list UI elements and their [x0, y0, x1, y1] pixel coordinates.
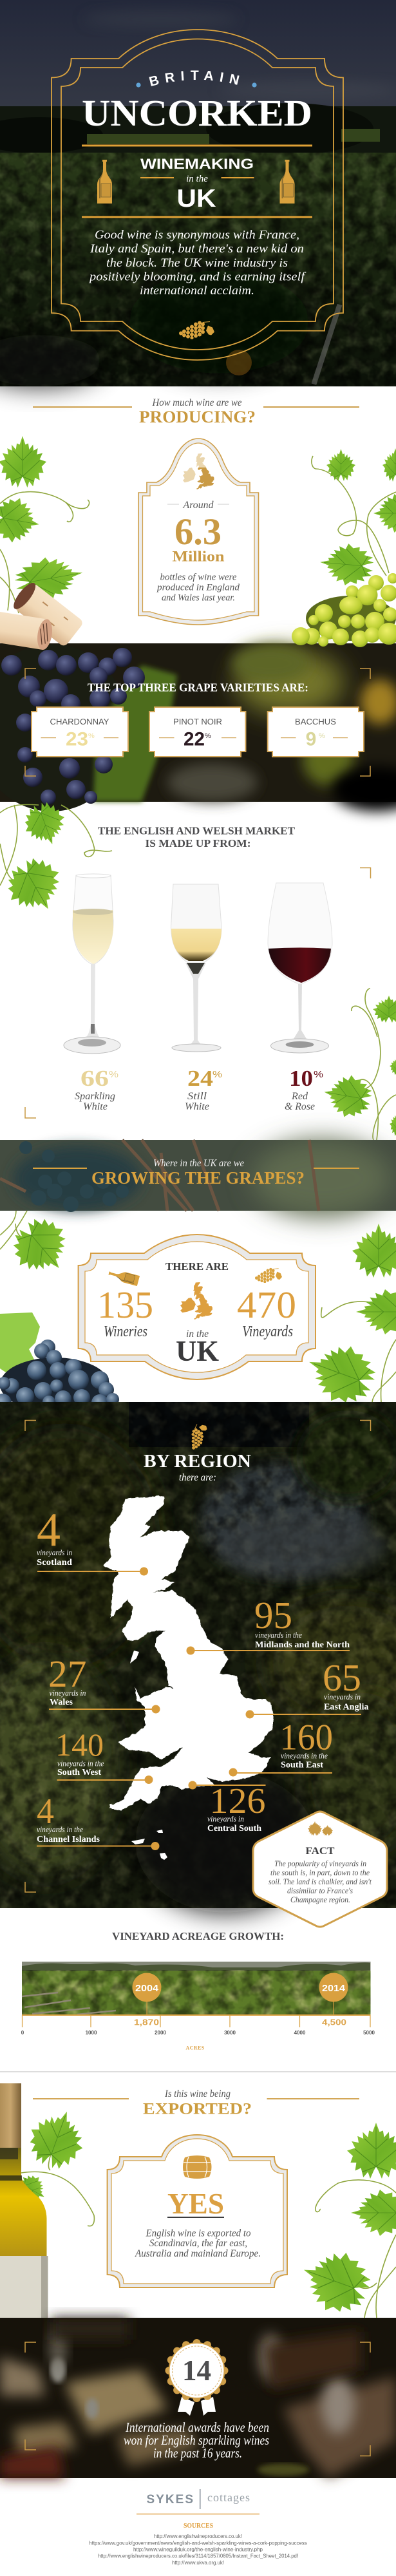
badge frame: [108, 2135, 287, 2287]
region: South West: [55, 1727, 153, 1784]
stat: sparkling white: White: [83, 1101, 108, 1112]
fact text: dissimilar to France's: [287, 1886, 353, 1895]
stat: red and rose: %: [314, 1069, 323, 1080]
axis labels: 0: [21, 2030, 24, 2036]
panel: market make-up: [0, 797, 396, 1140]
region: South East: South East: [281, 1761, 323, 1770]
region: Central South: vineyards in: [207, 1814, 244, 1824]
vines and leaves: [0, 797, 396, 1140]
sources: https://www.gov.uk/government/news/english-and-welsh-sparkling-wines-a-cork-popping-success: [89, 2540, 307, 2546]
region: Wales: 27: [48, 1653, 86, 1695]
in the UK: UK: [176, 1334, 219, 1367]
corner brackets: [25, 668, 370, 776]
intro text: Italy and Spain, but there's a new kid on: [90, 242, 304, 256]
axis title: ACRES: [185, 2045, 205, 2050]
export text: Australia and mainland Europe.: [135, 2248, 261, 2259]
corner brackets: [25, 2342, 370, 2456]
vines and leaves: [12, 2102, 396, 2322]
region: South East: vineyards in the: [281, 1750, 328, 1761]
axis labels: [21, 2030, 375, 2036]
stat: sparkling white: 66: [80, 1066, 109, 1091]
corner brackets: [25, 868, 371, 1118]
panel: producing section foliage: [0, 436, 396, 613]
intro text: [88, 228, 306, 298]
panel: by region: [0, 1402, 396, 1913]
region: Channel Islands: vineyards in the: [37, 1824, 83, 1834]
subtitle: in the: [186, 174, 208, 184]
panel: top three grape varieties: [0, 643, 396, 811]
fact text: soil. The land is chalkier, and isn't: [269, 1877, 372, 1886]
section heading: exported: [33, 2088, 359, 2117]
hexagon shape: [253, 1812, 387, 1927]
marker: 2014: 4,500: [322, 2017, 346, 2027]
sources: http://www.englishwineproducers.co.uk/files/3114/1857/0805/Instant_Fact_Sheet_2014.pdf: [98, 2553, 299, 2559]
stat: still white: %: [212, 1069, 222, 1080]
award text: won for English sparkling wines: [124, 2432, 269, 2448]
band photo background: [0, 1140, 396, 1217]
marker: 2004: 1,870: [134, 2017, 159, 2027]
icon: UK map: [183, 453, 214, 489]
stat: sparkling white: Sparkling: [75, 1091, 115, 1102]
fact text: the south is, in part, down to the: [270, 1868, 370, 1877]
region: East Anglia: [246, 1656, 368, 1718]
region: Midlands and the North: [187, 1594, 350, 1655]
card: Bacchus: [268, 707, 364, 757]
icon: UK map: [180, 1282, 212, 1320]
stat: still white: Still: [187, 1091, 207, 1102]
seal: [165, 2339, 228, 2402]
glass: sparkling white: [64, 874, 120, 1054]
section heading: producing: How much wine are we: [152, 397, 242, 408]
region: Midlands and the North: vineyards in the: [255, 1630, 302, 1640]
logo: Sykes cottages: cottages: [207, 2491, 250, 2504]
stat: wineries: Wineries: [104, 1323, 147, 1340]
award text: International awards have been: [125, 2420, 269, 2435]
stat: red and rose: [285, 1066, 323, 1112]
chart heading: VINEYARD ACREAGE GROWTH:: [112, 1930, 284, 1942]
glass: still white: [171, 884, 222, 1052]
region: Scotland: 4: [37, 1504, 61, 1557]
card: Chardonnay: 23: [66, 729, 88, 750]
region: South East: [229, 1717, 333, 1776]
intro text: international acclaim.: [140, 284, 254, 298]
panel: vineyard acreage growth: [21, 1930, 375, 2050]
market heading: [98, 824, 296, 849]
stat: still white: White: [185, 1101, 209, 1112]
band photo background: [0, 643, 396, 811]
region photo background: [0, 1402, 396, 1913]
award text: [124, 2420, 269, 2461]
stat: sparkling white: %: [109, 1069, 118, 1080]
vines left and right: [0, 456, 396, 613]
card: Bacchus: BACCHUS: [295, 717, 336, 726]
divider: [0, 2071, 396, 2072]
icon: barrel: [183, 2155, 211, 2179]
region: Wales: vineyards in: [49, 1688, 86, 1698]
ribbons: [178, 2397, 216, 2416]
panel: growing the grapes band: [0, 1140, 396, 1217]
region: South East: 160: [279, 1717, 333, 1758]
section heading: producing: [33, 397, 359, 426]
title: Britain arc: BRITAIN: [149, 71, 240, 86]
export text: English wine is exported to: [146, 2228, 251, 2239]
region: Central South: 126: [210, 1781, 265, 1821]
export text: [135, 2228, 261, 2259]
card: Pinot Noir: 22: [184, 729, 205, 750]
sources: http://www.wineguilduk.org/the-english-wine-industry.php: [133, 2546, 263, 2553]
image: white wine bottle: [0, 2083, 48, 2318]
subtitle: UK: [176, 185, 216, 213]
region: Scotland: Scotland: [37, 1558, 72, 1567]
axis labels: 1000: [86, 2030, 97, 2036]
sources: http://www.ukva.org.uk/: [172, 2560, 225, 2566]
badge frame: [138, 439, 259, 625]
card: Pinot Noir: PINOT NOIR: [173, 717, 222, 726]
section heading: growing: Where in the UK are we: [153, 1158, 244, 1169]
intro text: positively blooming, and is earning itself: [88, 270, 306, 283]
badge heading: THERE ARE: [165, 1260, 229, 1273]
stat: sparkling white: [75, 1066, 118, 1112]
stat: red and rose: 10: [289, 1066, 313, 1091]
icon: vine leaves: [308, 1821, 333, 1836]
glass: red and rose: [268, 883, 332, 1053]
region: South West: 140: [55, 1727, 104, 1763]
card: Pinot Noir: %: [205, 732, 211, 740]
card: Chardonnay: %: [88, 732, 95, 740]
region: South West: vineyards in the: [57, 1758, 104, 1768]
region: Midlands and the North: Midlands and the North: [255, 1640, 350, 1650]
vineyard photo strip: [22, 1962, 371, 2015]
around label: Around: [183, 500, 214, 511]
gold rule below subtitle: [82, 216, 312, 218]
image: green grapes: [292, 573, 396, 647]
icon: grapes: [179, 321, 214, 339]
map: Great Britain: [104, 1496, 274, 1860]
icon: grapes: [184, 1421, 211, 1452]
card: Chardonnay: CHARDONNAY: [50, 717, 109, 726]
stat: still white: [185, 1066, 222, 1112]
grape leaves right: [318, 448, 396, 588]
badge text: and Wales last year.: [162, 592, 235, 603]
axis labels: 5000: [363, 2030, 375, 2036]
card: Pinot Noir: [149, 707, 246, 757]
gold rule above subtitle: [82, 144, 312, 147]
subtitle: [140, 156, 254, 213]
region: Scotland: [37, 1504, 148, 1575]
region: Wales: [48, 1653, 160, 1713]
region: South West: South West: [57, 1768, 101, 1777]
fact text: The popularity of vineyards in: [274, 1859, 366, 1868]
icon: grapes: [255, 1268, 282, 1283]
region: Central South: Central South: [207, 1824, 261, 1833]
badge text: [156, 572, 240, 603]
region: Channel Islands: 4: [37, 1792, 54, 1832]
panel: exported section: [0, 2083, 396, 2322]
intro text: the block. The UK wine industry is: [106, 256, 288, 270]
yes answer: YES: [167, 2187, 224, 2220]
stat: vineyards: Vineyards: [242, 1323, 293, 1340]
vines and leaves: [0, 1208, 396, 1412]
icon: left bottle: [97, 160, 112, 204]
around label: [167, 500, 229, 511]
card: Chardonnay: [32, 707, 128, 757]
panel: wineries and vineyards: [0, 1208, 396, 1412]
market heading: THE ENGLISH AND WELSH MARKET: [98, 824, 296, 837]
band photo background: [0, 2318, 396, 2478]
ornate gold frame: [52, 30, 343, 360]
region: East Anglia: 65: [323, 1656, 361, 1699]
stat: still white: 24: [187, 1066, 213, 1091]
band heading: THE TOP THREE GRAPE VARIETIES ARE:: [88, 681, 308, 694]
fact heading: FACT: [305, 1846, 335, 1857]
region: Scotland: vineyards in: [37, 1548, 72, 1557]
badge text: produced in England: [156, 582, 240, 592]
stat: red and rose: Red: [291, 1091, 308, 1102]
heading: by region: [144, 1451, 251, 1483]
axis labels: 4000: [294, 2030, 306, 2036]
intro text: Good wine is synonymous with France,: [95, 228, 299, 242]
export text: Scandinavia, the far east,: [149, 2238, 247, 2249]
badge frame: [79, 1235, 316, 1379]
axis labels: 2000: [155, 2030, 166, 2036]
market heading: IS MADE UP FROM:: [146, 837, 251, 849]
logo: Sykes cottages: [147, 2489, 250, 2509]
badge text: bottles of wine were: [160, 572, 237, 582]
marker: 2004: [133, 1973, 161, 2027]
card: Bacchus: %: [319, 732, 325, 740]
rosette badge: [165, 2339, 228, 2416]
section heading: exported: EXPORTED?: [143, 2101, 252, 2117]
in the UK: in the: [186, 1329, 209, 1340]
fact text: Champagne region.: [290, 1895, 350, 1904]
region: Central South: [188, 1781, 265, 1833]
region: Midlands and the North: 95: [254, 1594, 292, 1636]
region: East Anglia: vineyards in: [324, 1692, 361, 1701]
number 6.3 million: [173, 511, 225, 564]
panel: awards band: [0, 2318, 396, 2478]
sources: http://www.englishwineproducers.co.uk/: [154, 2533, 243, 2539]
stat: wineries: 135: [97, 1283, 153, 1326]
number 14: 14: [182, 2354, 211, 2387]
logo: Sykes cottages: SYKES: [147, 2493, 193, 2506]
grape leaves left: [0, 436, 86, 606]
marker: 2014: [319, 1973, 348, 2027]
number 6.3 million: 6.3: [174, 511, 222, 553]
heading: by region: BY REGION: [144, 1451, 251, 1472]
axis and ticks: [22, 2015, 371, 2027]
region: Wales: Wales: [50, 1698, 73, 1707]
number 6.3 million: Million: [173, 549, 225, 564]
panel: hero header: [0, 0, 396, 406]
section heading: growing: [33, 1158, 359, 1188]
image: white corks: [0, 580, 84, 651]
title: Uncorked: UNCORKED: [82, 92, 312, 134]
corner brackets: [25, 1421, 371, 1892]
purple grapes: [1, 648, 145, 805]
hero photo background: [0, 0, 396, 386]
marker: 2004: 2004: [135, 1983, 159, 1994]
icon: tilted bottle: [108, 1268, 140, 1286]
section heading: exported: Is this wine being: [164, 2088, 231, 2099]
stat: vineyards: 470: [237, 1283, 296, 1326]
section heading: growing: GROWING THE GRAPES?: [91, 1168, 305, 1188]
panel: 6.3 million badge: [138, 439, 259, 625]
region: Channel Islands: Channel Islands: [37, 1835, 100, 1844]
section heading: producing: PRODUCING?: [139, 408, 256, 426]
marker: 2014: 2014: [322, 1983, 346, 1994]
subtitle: WINEMAKING: [140, 156, 254, 172]
light leaf and blue grapes: [0, 1312, 119, 1412]
stat: red and rose: & Rose: [285, 1101, 315, 1112]
panel: fact hexagon: [253, 1812, 387, 1927]
sources: [89, 2522, 307, 2566]
sources: SOURCES: [184, 2522, 213, 2530]
axis labels: 3000: [224, 2030, 236, 2036]
award text: in the past 16 years.: [153, 2445, 242, 2461]
region: Channel Islands: [37, 1792, 160, 1850]
fact text: [269, 1859, 372, 1904]
icon: right bottle: [279, 160, 295, 204]
title: Britain arc: [136, 71, 257, 88]
card: Bacchus: 9: [306, 729, 316, 750]
heading: by region: there are:: [179, 1472, 216, 1483]
region: East Anglia: East Anglia: [324, 1703, 368, 1712]
